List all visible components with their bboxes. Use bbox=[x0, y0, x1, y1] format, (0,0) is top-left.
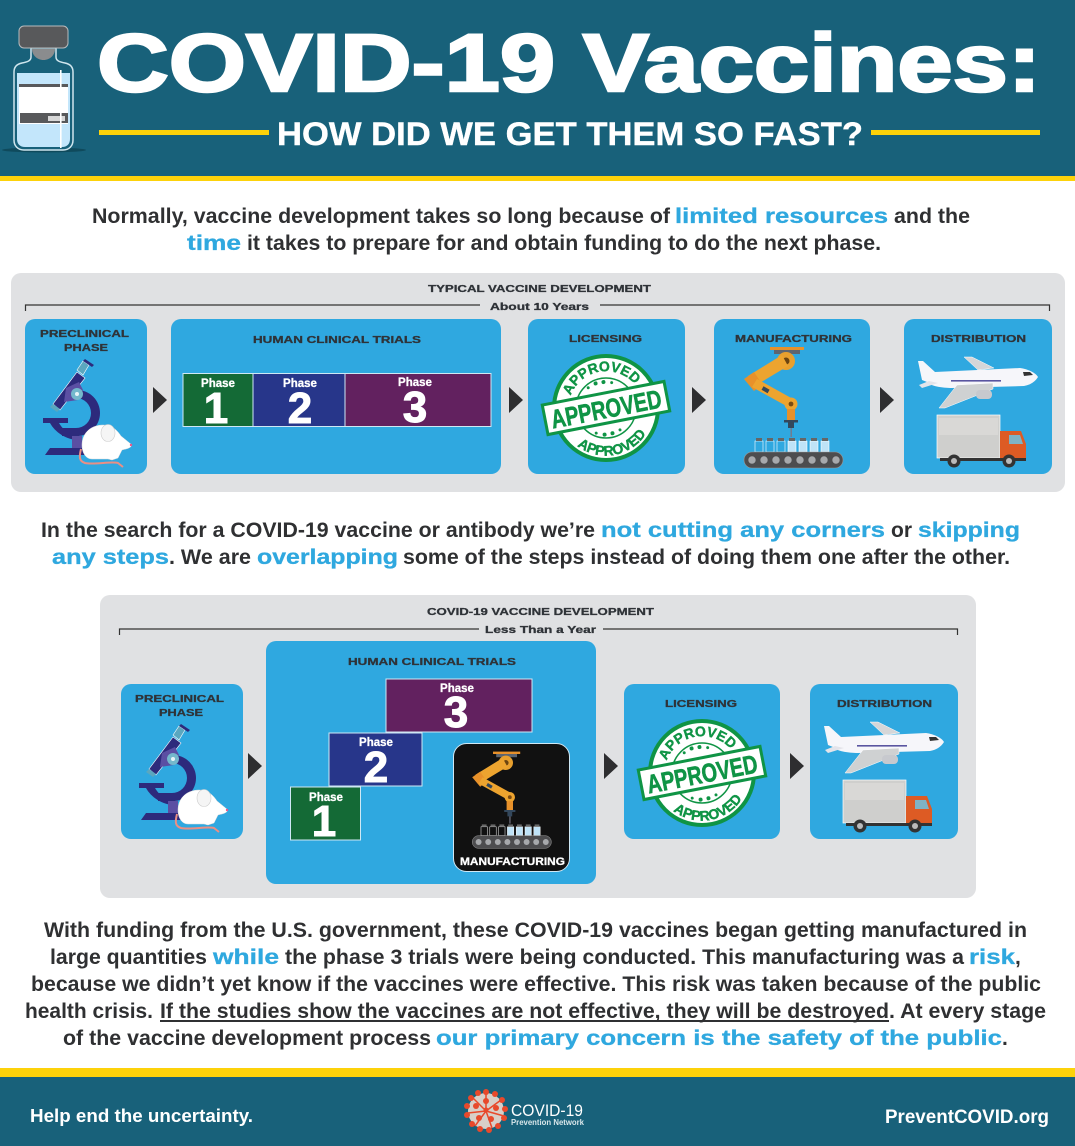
intro text: Normally, vaccine development takes so long because of bbox=[92, 205, 671, 228]
intro text: time bbox=[187, 232, 241, 255]
closing paragraph: large quantities bbox=[50, 946, 207, 969]
closing paragraph: , bbox=[1015, 946, 1021, 969]
middle text: . We are bbox=[169, 546, 251, 569]
intro text: limited resources bbox=[675, 205, 888, 228]
closing paragraph: . bbox=[1002, 1027, 1008, 1050]
middle text: any steps bbox=[52, 546, 169, 569]
card: distribution: DISTRIBUTION bbox=[837, 698, 932, 710]
closing paragraph: . At every stage bbox=[889, 1000, 1046, 1023]
card: licensing bbox=[624, 684, 780, 839]
card: preclinical phase: PRECLINICAL bbox=[40, 328, 130, 340]
card: distribution: DISTRIBUTION bbox=[931, 333, 1026, 345]
card: manufacturing (black): MANUFACTURING bbox=[460, 856, 565, 868]
card: manufacturing: MANUFACTURING bbox=[735, 333, 852, 345]
arrow bbox=[790, 753, 804, 779]
card: human clinical trials: HUMAN CLINICAL TRIALS bbox=[253, 334, 421, 346]
middle text bbox=[41, 519, 1020, 569]
phase 3: 3 bbox=[403, 383, 427, 432]
subtitle with yellow rules: HOW DID WE GET THEM SO FAST? bbox=[277, 116, 863, 152]
card: preclinical phase bbox=[121, 684, 243, 839]
logo: covid-19 prevention network: Prevention Network bbox=[511, 1118, 585, 1127]
timeline bracket: less than a year bbox=[120, 624, 958, 636]
closing paragraph: of the vaccine development process bbox=[63, 1027, 431, 1050]
card: preclinical phase: PRECLINICAL bbox=[135, 693, 225, 705]
card: human clinical trials: HUMAN CLINICAL TRIALS bbox=[348, 656, 516, 668]
middle text: skipping bbox=[918, 519, 1020, 542]
closing paragraph bbox=[25, 919, 1046, 1050]
card: licensing: LICENSING bbox=[569, 333, 642, 345]
card: preclinical phase: PHASE bbox=[64, 342, 108, 354]
phase 2: Phase bbox=[283, 378, 317, 390]
timeline bracket: less than a year: Less Than a Year bbox=[485, 624, 596, 636]
middle text: In the search for a COVID-19 vaccine or antibody we’re bbox=[41, 519, 595, 542]
arrow bbox=[692, 387, 706, 413]
phase 1: 1 bbox=[204, 384, 228, 433]
phase 1 bbox=[290, 787, 360, 846]
closing paragraph: risk bbox=[969, 946, 1015, 969]
panel heading: TYPICAL VACCINE DEVELOPMENT bbox=[428, 283, 652, 295]
intro text bbox=[92, 205, 970, 255]
icon: vaccine vial bbox=[2, 26, 86, 152]
closing paragraph: while bbox=[212, 946, 279, 969]
arrow bbox=[248, 753, 262, 779]
middle text: not cutting any corners bbox=[601, 519, 885, 542]
panel: typical vaccine development bbox=[11, 273, 1065, 492]
phase 2: 2 bbox=[364, 743, 388, 792]
arrow bbox=[153, 387, 167, 413]
timeline bracket: about 10 years bbox=[26, 301, 1050, 313]
arrow bbox=[880, 387, 894, 413]
closing paragraph: the phase 3 trials were being conducted. This manufacturing was a bbox=[285, 946, 964, 969]
panel heading: COVID-19 VACCINE DEVELOPMENT bbox=[427, 606, 655, 618]
phase 3: Phase bbox=[440, 683, 474, 695]
phase 2 bbox=[329, 733, 422, 792]
footer website: PreventCOVID.org bbox=[885, 1107, 1049, 1128]
timeline bracket: about 10 years: About 10 Years bbox=[490, 301, 589, 313]
card: distribution bbox=[904, 319, 1052, 474]
arrow bbox=[509, 387, 523, 413]
phase 1: Phase bbox=[201, 378, 235, 390]
closing paragraph: If the studies show the vaccines are not effective, they will be destroyed bbox=[160, 1000, 889, 1023]
card: manufacturing (black) bbox=[454, 744, 570, 872]
closing paragraph: because we didn’t yet know if the vaccines were effective. This risk was taken because of the public bbox=[31, 973, 1041, 996]
card: human clinical trials bbox=[171, 319, 501, 474]
panel: covid-19 vaccine development bbox=[100, 595, 976, 898]
card: preclinical phase bbox=[25, 319, 147, 474]
intro text: it takes to prepare for and obtain funding to do the next phase. bbox=[247, 232, 881, 255]
card: manufacturing bbox=[714, 319, 870, 474]
subtitle with yellow rules bbox=[99, 116, 1040, 152]
phase 3: 3 bbox=[444, 688, 468, 737]
intro text: and the bbox=[894, 205, 970, 228]
phase 3: Phase bbox=[398, 377, 432, 389]
closing paragraph: With funding from the U.S. government, these COVID-19 vaccines began getting manufactured in bbox=[44, 919, 1027, 942]
card: preclinical phase: PHASE bbox=[159, 707, 203, 719]
phase 1 bbox=[183, 374, 253, 433]
phase 2 bbox=[253, 374, 345, 433]
logo: covid-19 prevention network: COVID-19 bbox=[511, 1101, 583, 1120]
phase 3 bbox=[345, 374, 491, 432]
card: human clinical trials bbox=[266, 641, 596, 884]
phase 3 bbox=[386, 679, 532, 737]
middle text: or bbox=[891, 519, 912, 542]
middle text: some of the steps instead of doing them one after the other. bbox=[403, 546, 1010, 569]
closing paragraph: health crisis. bbox=[25, 1000, 153, 1023]
footer tagline: Help end the uncertainty. bbox=[30, 1105, 253, 1126]
closing paragraph: our primary concern is the safety of the public bbox=[436, 1027, 1002, 1050]
card: licensing bbox=[528, 319, 685, 474]
phase 2: 2 bbox=[288, 384, 312, 433]
phase 1: 1 bbox=[312, 797, 336, 846]
title: COVID-19 Vaccines: bbox=[97, 18, 1041, 109]
phase 2: Phase bbox=[359, 737, 393, 749]
footer bbox=[0, 1068, 1075, 1146]
arrow bbox=[604, 753, 618, 779]
logo: covid-19 prevention network bbox=[464, 1089, 585, 1133]
middle text: overlapping bbox=[257, 546, 398, 569]
phase 1: Phase bbox=[309, 792, 343, 804]
header banner bbox=[0, 0, 1075, 181]
card: licensing: LICENSING bbox=[665, 698, 737, 710]
card: distribution bbox=[810, 684, 958, 839]
